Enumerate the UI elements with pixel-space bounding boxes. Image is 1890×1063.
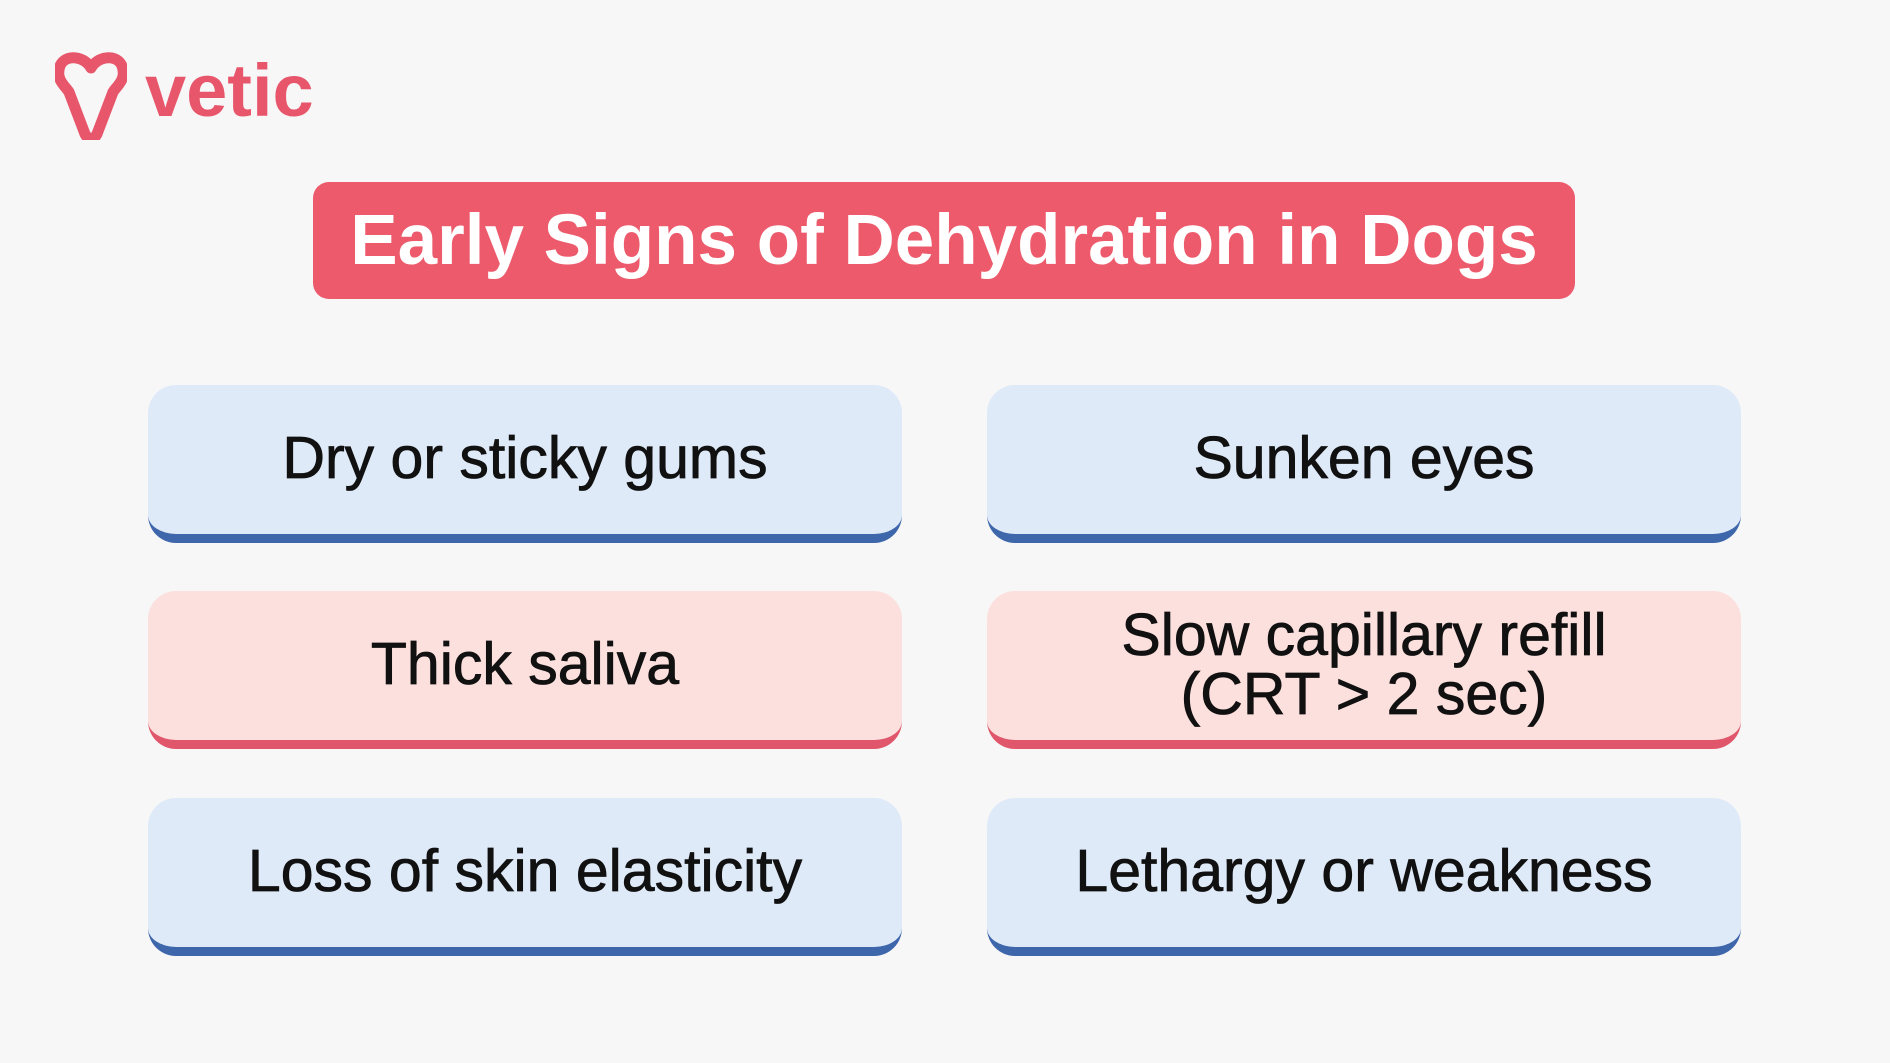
card: skin elasticity: Loss of skin elasticity [248, 838, 802, 904]
card: dry gums: Dry or sticky gums [282, 425, 768, 491]
logo text: vetic [145, 49, 314, 132]
card: lethargy: Lethargy or weakness [1075, 838, 1653, 904]
card: slow CRT [987, 591, 1741, 749]
card: sunken eyes [987, 385, 1741, 543]
card: thick saliva [148, 591, 902, 749]
title: Early Signs of Dehydration in Dogs [350, 201, 1538, 280]
card: thick saliva: Thick saliva [371, 631, 679, 697]
title [313, 182, 1575, 299]
card: dry gums [148, 385, 902, 543]
card: slow CRT: Slow capillary refill [1121, 602, 1607, 668]
card: skin elasticity [148, 798, 902, 956]
card: lethargy [987, 798, 1741, 956]
card: slow CRT: (CRT > 2 sec) [1181, 660, 1547, 726]
icon: heart V [55, 52, 127, 140]
logo [55, 49, 314, 140]
card: sunken eyes: Sunken eyes [1193, 425, 1535, 491]
